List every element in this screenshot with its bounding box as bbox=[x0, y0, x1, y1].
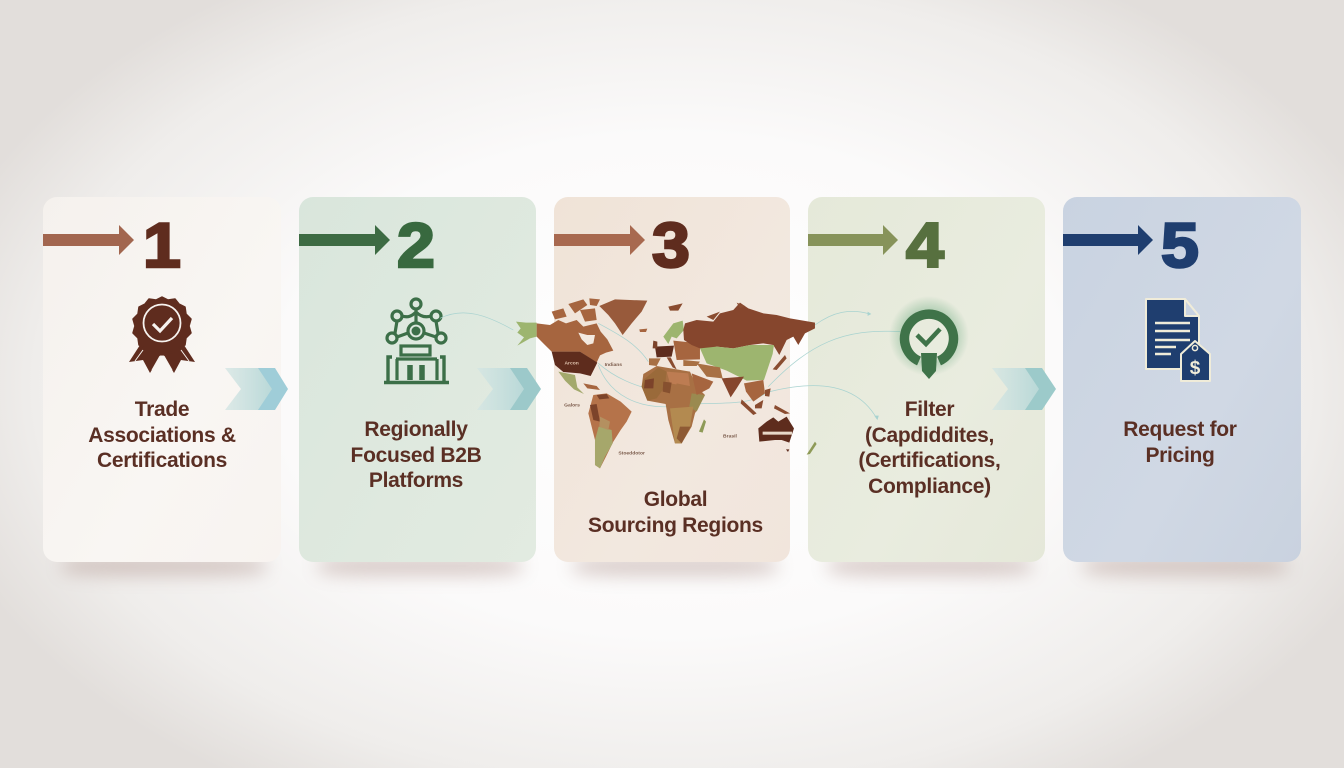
step 1 label: Trade bbox=[135, 398, 189, 421]
panel: step 5 request for pricing bbox=[1063, 197, 1301, 562]
step 5 label: Pricing bbox=[1145, 444, 1215, 466]
step 3 label: Sourcing Regions bbox=[588, 514, 763, 536]
map labels: Brasil bbox=[723, 434, 738, 440]
chevron: step 4 to 5 bbox=[992, 368, 1056, 410]
arrow: step 2 bbox=[299, 225, 390, 255]
arrow: step 3 bbox=[554, 225, 645, 255]
panel: step 1 trade associations bbox=[43, 197, 281, 562]
panel: step 2 B2B platforms bbox=[299, 197, 536, 562]
step 5 label: Request for bbox=[1123, 418, 1237, 441]
map labels bbox=[564, 360, 738, 456]
step 5 label bbox=[1123, 418, 1237, 466]
chevron: step 1 to 2 bbox=[225, 368, 288, 410]
step 4 label: Filter bbox=[905, 398, 954, 421]
panel: step 4 filter bbox=[808, 197, 1045, 562]
step 1 label: Associations & bbox=[88, 424, 236, 446]
step number 5: 5 bbox=[1161, 211, 1199, 281]
arrow: step 1 bbox=[43, 225, 134, 255]
step 4 label: (Certifications, bbox=[858, 449, 1001, 472]
icon: document with price tag: $ bbox=[1190, 358, 1201, 379]
step 2 label: Regionally bbox=[364, 418, 468, 441]
step number 1: 1 bbox=[143, 211, 181, 281]
icon: magnifier check bbox=[889, 296, 969, 379]
icon: document with price tag bbox=[1146, 299, 1210, 381]
step number 3: 3 bbox=[652, 211, 690, 281]
europe bbox=[639, 321, 700, 369]
map labels: Stoeddotor bbox=[618, 450, 645, 456]
world map with connection lines bbox=[440, 298, 900, 468]
africa bbox=[642, 366, 706, 443]
step 4 label: (Capdiddites, bbox=[865, 424, 994, 446]
step number 4: 4 bbox=[906, 211, 944, 281]
map labels: Galors bbox=[564, 402, 580, 408]
step 3 label: Global bbox=[644, 488, 707, 511]
icon: network over building bbox=[384, 299, 449, 382]
map labels: Arcon bbox=[564, 360, 579, 366]
step 4 label bbox=[858, 398, 1001, 498]
connection lines bbox=[440, 311, 900, 419]
step 3 label bbox=[588, 488, 763, 536]
north america bbox=[516, 298, 647, 394]
step 2 label: Platforms bbox=[369, 469, 463, 492]
arrow: step 4 bbox=[808, 225, 898, 255]
panel: step 3 global sourcing regions bbox=[554, 197, 790, 562]
step 2 label bbox=[351, 418, 481, 492]
step 2 label: Focused B2B bbox=[351, 444, 481, 466]
step 4 label: Compliance) bbox=[868, 474, 991, 498]
australia and new zealand bbox=[758, 417, 817, 455]
step number 2: 2 bbox=[397, 211, 435, 281]
map labels: Indians bbox=[605, 362, 622, 368]
south america bbox=[588, 393, 632, 468]
step 1 label bbox=[88, 398, 236, 472]
chevron: step 2 to 3 bbox=[477, 368, 541, 410]
icon: award rosette bbox=[129, 297, 195, 373]
arrow: step 5 bbox=[1063, 225, 1153, 255]
asia bbox=[668, 303, 815, 415]
step 1 label: Certifications bbox=[97, 449, 227, 472]
